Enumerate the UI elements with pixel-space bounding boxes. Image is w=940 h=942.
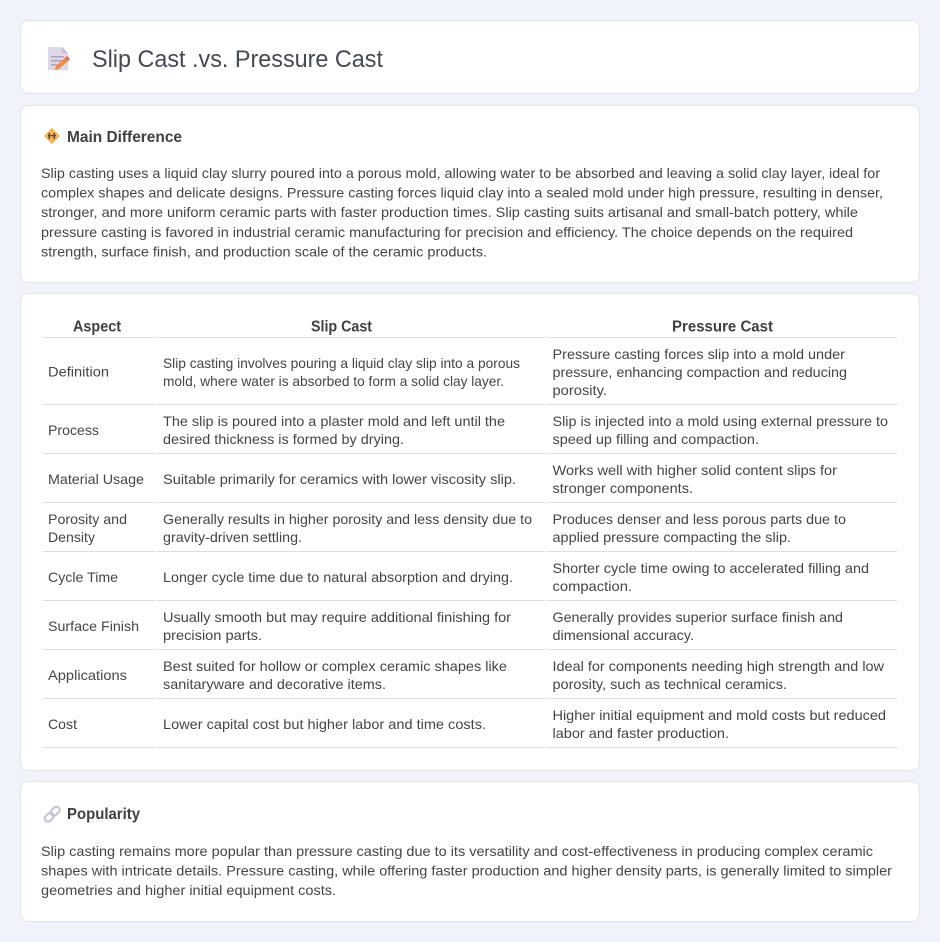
row: surface finish: dimensional accuracy. bbox=[552, 627, 694, 643]
row: cost: Higher initial equipment and mold costs but reduced bbox=[552, 707, 886, 723]
row: definition: pressure, enhancing compaction and reducing bbox=[552, 364, 847, 380]
row: surface finish: precision parts. bbox=[163, 627, 262, 643]
row: surface finish: Surface Finish bbox=[48, 618, 139, 634]
row: porosity and density: Porosity and bbox=[48, 511, 127, 527]
row: material usage: stronger components. bbox=[552, 480, 693, 496]
row: porosity and density: applied pressure compacting the slip. bbox=[552, 529, 791, 545]
heading: popularity: Popularity bbox=[67, 806, 140, 823]
row: process: Process bbox=[48, 422, 99, 438]
table header row: Pressure Cast bbox=[672, 318, 774, 336]
row: cost bbox=[43, 707, 897, 748]
row: definition: porosity. bbox=[552, 382, 607, 398]
row: porosity and density: Produces denser and less porous parts due to bbox=[552, 511, 846, 527]
panel: main difference bbox=[20, 106, 920, 282]
row: process: desired thickness is formed by drying. bbox=[163, 431, 404, 447]
row: definition bbox=[43, 346, 897, 405]
row: material usage: Material Usage bbox=[48, 471, 144, 487]
row: process bbox=[43, 413, 897, 454]
row: cycle time: Cycle Time bbox=[48, 569, 118, 585]
row: cycle time: Shorter cycle time owing to accelerated filling and bbox=[552, 560, 869, 576]
heading: main difference: Main Difference bbox=[67, 129, 182, 146]
text block: main difference paragraph: pressure casting is favored in industrial ceramic manufacturing for precision and efficiency. The choice depends on the required bbox=[41, 224, 853, 240]
text block: main difference paragraph: stronger, and more uniform ceramic parts with faster production times. Slip casting suits artisanal and small-batch pottery, while bbox=[41, 204, 858, 220]
row: porosity and density: Generally results in higher porosity and less density due to bbox=[163, 511, 532, 527]
row: applications: sanitaryware and decorative items. bbox=[163, 676, 386, 692]
icon: chain link bbox=[43, 805, 61, 823]
row: cycle time: Longer cycle time due to natural absorption and drying. bbox=[163, 569, 513, 585]
row: definition: Slip casting involves pouring a liquid clay slip into a porous bbox=[163, 355, 520, 371]
text block: main difference paragraph: strength, surface finish, and production scale of the ceramic products. bbox=[41, 244, 487, 260]
row: cycle time bbox=[43, 560, 897, 601]
text block: popularity paragraph: Slip casting remains more popular than pressure casting due to its versatility and cost-effectiveness in producing complex ceramic bbox=[41, 843, 873, 859]
row: definition: Definition bbox=[48, 364, 109, 380]
row: surface finish bbox=[43, 609, 897, 650]
row: material usage bbox=[43, 462, 897, 503]
text block: popularity paragraph bbox=[41, 843, 892, 898]
row: cost: Cost bbox=[48, 716, 77, 732]
row: process: The slip is poured into a plaster mold and left until the bbox=[163, 413, 505, 429]
panel: comparison table bbox=[20, 294, 920, 770]
icon: document with pencil bbox=[48, 47, 70, 70]
row: porosity and density: Density bbox=[48, 529, 95, 545]
row: material usage: Works well with higher solid content slips for bbox=[552, 462, 837, 478]
row: applications: Ideal for components needing high strength and low bbox=[552, 658, 885, 674]
text block: popularity paragraph: geometries and higher initial equipment costs. bbox=[41, 882, 336, 898]
row: process: speed up filling and compaction. bbox=[552, 431, 759, 447]
row: porosity and density: gravity-driven settling. bbox=[163, 529, 302, 545]
row: applications: porosity, such as technical ceramics. bbox=[552, 676, 787, 692]
row: process: Slip is injected into a mold using external pressure to bbox=[552, 413, 888, 429]
row: material usage: Suitable primarily for ceramics with lower viscosity slip. bbox=[163, 471, 516, 487]
table header row: Slip Cast bbox=[311, 318, 373, 336]
text block: main difference paragraph: complex shapes and delicate designs. Pressure casting forces liquid clay into a sealed mold under high pressure, resulting in denser, bbox=[41, 185, 883, 201]
title: Slip Cast .vs. Pressure Cast bbox=[92, 46, 383, 73]
row: cycle time: compaction. bbox=[552, 578, 632, 594]
row: surface finish: Generally provides superior surface finish and bbox=[552, 609, 843, 625]
icon: orange diamond sign bbox=[44, 128, 60, 144]
text block: popularity paragraph: shapes with intricate details. Pressure casting, while offering faster production and higher density parts, is generally limited to simpler bbox=[41, 863, 892, 879]
row: porosity and density bbox=[43, 511, 897, 552]
row: definition: mold, where water is absorbed to form a solid clay layer. bbox=[163, 373, 504, 389]
panel: popularity bbox=[20, 782, 920, 922]
table header row bbox=[43, 318, 897, 338]
row: cost: Lower capital cost but higher labor and time costs. bbox=[163, 716, 486, 732]
row: applications bbox=[43, 658, 897, 699]
row: applications: Best suited for hollow or complex ceramic shapes like bbox=[163, 658, 507, 674]
row: cost: labor and faster production. bbox=[552, 725, 729, 741]
row: applications: Applications bbox=[48, 667, 127, 683]
row: surface finish: Usually smooth but may require additional finishing for bbox=[163, 609, 511, 625]
text block: main difference paragraph bbox=[41, 165, 883, 260]
text block: main difference paragraph: Slip casting uses a liquid clay slurry poured into a porous mold, allowing water to be absorbed and leaving a solid clay layer, ideal for bbox=[41, 165, 880, 181]
table header row: Aspect bbox=[73, 318, 122, 336]
panel: title header bbox=[20, 20, 920, 94]
row: definition: Pressure casting forces slip into a mold under bbox=[552, 346, 845, 362]
